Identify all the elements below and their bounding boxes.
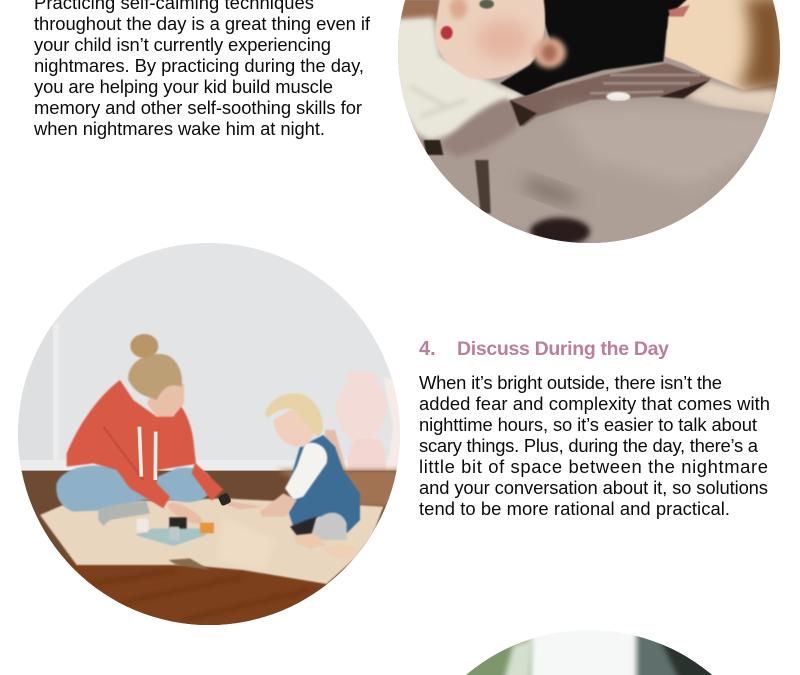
wall pillar and baseboard	[18, 327, 51, 460]
photo: partially visible circle at bottom	[466, 630, 712, 675]
pink vases	[324, 372, 400, 470]
woman's jeans	[56, 465, 212, 512]
text block: self-calming practice: your child isn’t currently experiencing	[34, 34, 331, 55]
dark hair	[500, 0, 690, 97]
heading: 4. Discuss During the Day: Discuss During the Day	[457, 338, 669, 360]
sleeve fold	[440, 98, 518, 157]
toy board	[135, 528, 207, 546]
text block: self-calming practice: nightmares. By practicing during the day,	[34, 55, 364, 76]
hoodie strings	[139, 427, 156, 480]
text block: self-calming practice: memory and other self-soothing skills for	[34, 97, 362, 118]
text block: discuss during the day: nighttime hours, so it’s easier to talk about	[419, 414, 757, 435]
text block: discuss during the day: added fear and complexity that comes with	[419, 393, 770, 414]
dark shadow at hem	[530, 218, 590, 246]
text block: self-calming practice: when nightmares wake him at night.	[33, 118, 325, 139]
woman's head, hair and bun	[147, 383, 184, 417]
baby's face	[435, 0, 545, 79]
text block: discuss during the day	[419, 372, 770, 519]
woman's sock	[98, 502, 150, 526]
knitted scarf	[503, 63, 712, 127]
mother's neck lower	[687, 82, 777, 117]
baby's eye and lips	[479, 0, 494, 9]
mother's face and neck	[665, 0, 783, 90]
text block: discuss during the day: tend to be more rational and practical.	[419, 498, 730, 519]
white patch	[606, 92, 630, 101]
toddler's sleeve	[285, 443, 327, 500]
toddler's leggings and shoes	[310, 513, 347, 540]
wooden floor	[10, 471, 410, 630]
toddler's head and hair	[273, 410, 315, 447]
text block: self-calming practice: throughout the day is a great thing even if	[34, 13, 371, 34]
text block: discuss during the day: and your conversation about it, so solutions	[419, 477, 768, 498]
text block: discuss during the day: little bit of space between the nightmare	[419, 456, 768, 477]
text block: self-calming practice: you are helping your kid build muscle	[34, 76, 333, 97]
heading: 4. Discuss During the Day: 4.	[419, 338, 436, 360]
baby's white garment	[390, 17, 523, 140]
baby's ear	[533, 37, 566, 68]
toddler's arm and hand	[260, 493, 297, 517]
taupe sweater	[490, 100, 770, 243]
text block: self-calming practice	[33, 0, 371, 139]
top-left warm background	[400, 0, 440, 20]
woman's hoodie	[67, 380, 196, 508]
photo: mother holding baby in circle	[390, 0, 787, 253]
toddler's dress	[287, 435, 360, 533]
text block: discuss during the day: When it’s bright outside, there isn’t the	[419, 372, 722, 393]
text block: discuss during the day: scary things. Plus, during the day, there’s a	[419, 435, 759, 456]
photo: mother and toddler playing on floor in circle	[10, 243, 410, 630]
woman's arm, watch and hand	[168, 502, 202, 524]
beige blanket	[40, 498, 383, 584]
